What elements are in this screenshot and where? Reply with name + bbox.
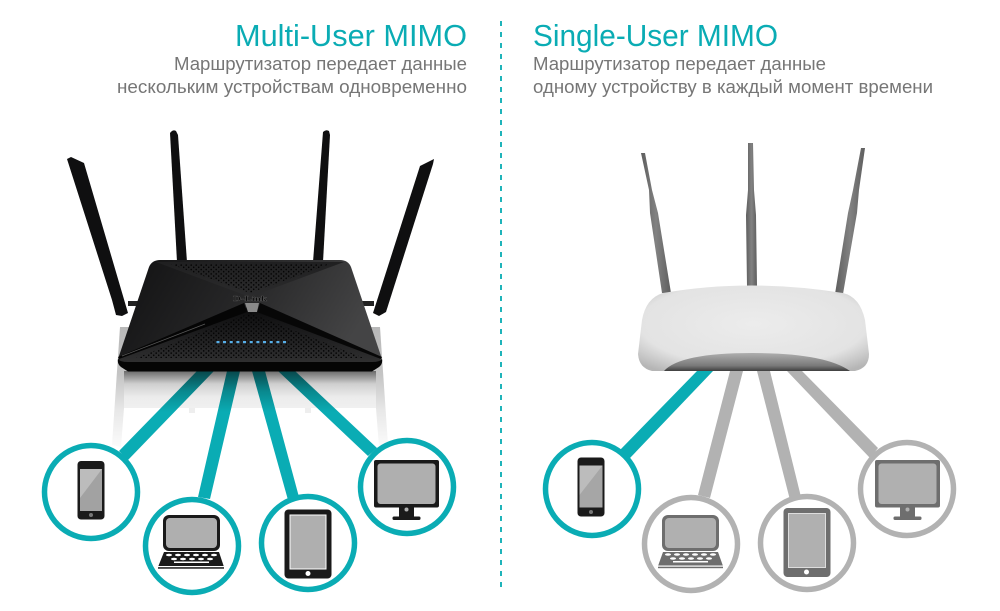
tablet icon (284, 510, 332, 578)
wedge ridge left (118, 303, 247, 359)
title: Single-User MIMO: Single-User MIMO (533, 18, 778, 53)
monitor icon (875, 460, 940, 520)
description line 1: Маршрутизатор передает данные (174, 53, 467, 74)
panel: single-user heading (533, 18, 933, 97)
router body (118, 260, 382, 371)
ring (146, 500, 238, 592)
top vent panel (156, 262, 344, 297)
ring (760, 496, 854, 590)
router: D-Link black with four antennas (67, 130, 434, 372)
base edge (118, 359, 382, 372)
connection lines: single-user (620, 371, 878, 500)
ring (262, 496, 354, 590)
laptop icon (658, 515, 723, 568)
router reflection: left (112, 327, 388, 447)
ring (644, 498, 738, 590)
title: Multi-User MIMO: Multi-User MIMO (235, 18, 467, 53)
monitor icon (374, 460, 439, 520)
wedge ridge right (257, 303, 382, 359)
centre light piece (245, 303, 259, 312)
router: white with three antennas (638, 143, 869, 371)
status LEDs (216, 341, 286, 343)
logo: D-Link (233, 294, 268, 303)
connection lines: multi-user (119, 371, 377, 500)
wedge highlight (122, 324, 205, 356)
ring (44, 446, 138, 538)
description line 2: одному устройству в каждый момент времени (533, 76, 933, 97)
front vent mesh (136, 313, 364, 358)
router shell (638, 286, 869, 371)
phone icon (78, 461, 104, 520)
ring (546, 442, 638, 536)
antennas (641, 143, 865, 294)
device: monitor, multi-user (360, 440, 454, 534)
device: tablet, multi-user (262, 496, 354, 590)
top vent mesh (170, 264, 330, 293)
phone icon (578, 458, 604, 516)
device: monitor, single-user (inactive) (860, 442, 954, 536)
front lip (664, 353, 850, 371)
laptop icon (158, 515, 224, 569)
front panel (119, 306, 381, 362)
panel: multi-user heading (117, 18, 467, 97)
device: tablet, single-user (inactive) (760, 496, 854, 590)
device: phone, multi-user (44, 446, 138, 538)
ring (360, 440, 454, 534)
description line 2: нескольким устройствам одновременно (117, 76, 467, 97)
device: laptop, multi-user (146, 500, 238, 592)
antennas (67, 130, 434, 316)
dashed divider (500, 21, 502, 588)
device: phone, single-user (active) (546, 442, 638, 536)
device: laptop, single-user (inactive) (644, 498, 738, 590)
tablet icon (784, 508, 830, 577)
ring (860, 442, 954, 536)
description line 1: Маршрутизатор передает данные (533, 53, 826, 74)
